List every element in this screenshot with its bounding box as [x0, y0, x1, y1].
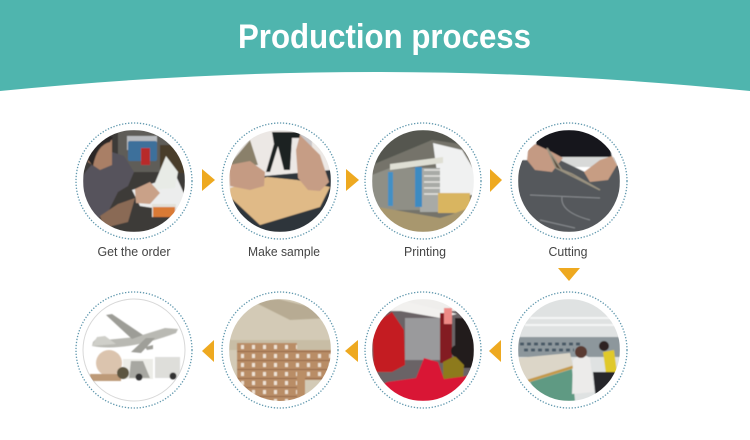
title: Production process	[238, 18, 531, 56]
arrow	[489, 340, 501, 362]
label: Cutting	[548, 245, 588, 259]
arrow	[202, 340, 214, 362]
step: sewing workshop	[511, 292, 627, 408]
arrow	[346, 169, 359, 191]
arrow	[345, 340, 358, 362]
step: cutting	[511, 123, 627, 259]
label: Make sample	[248, 245, 320, 259]
step: printing	[365, 123, 481, 259]
label: Get the order	[98, 245, 170, 259]
photo: cutting fabric	[518, 130, 620, 232]
photo: designer with swatches	[83, 130, 186, 232]
arrow	[490, 169, 502, 192]
photo: printing machine	[372, 130, 474, 232]
step: get the order	[76, 123, 192, 259]
label: Printing	[404, 245, 446, 259]
header banner	[0, 0, 750, 91]
arrow	[202, 169, 215, 191]
photo: red garments	[372, 299, 474, 401]
photo: pattern on table	[229, 130, 331, 232]
step: make sample	[222, 123, 338, 259]
photo: stacked cartons	[229, 299, 331, 403]
photo: sewing floor	[518, 299, 620, 401]
step: delivery	[76, 292, 192, 408]
step: sewing finishing	[365, 292, 481, 408]
arrow	[558, 268, 580, 281]
step: warehouse	[222, 292, 338, 408]
photo: plane, truck and globe	[90, 314, 180, 381]
